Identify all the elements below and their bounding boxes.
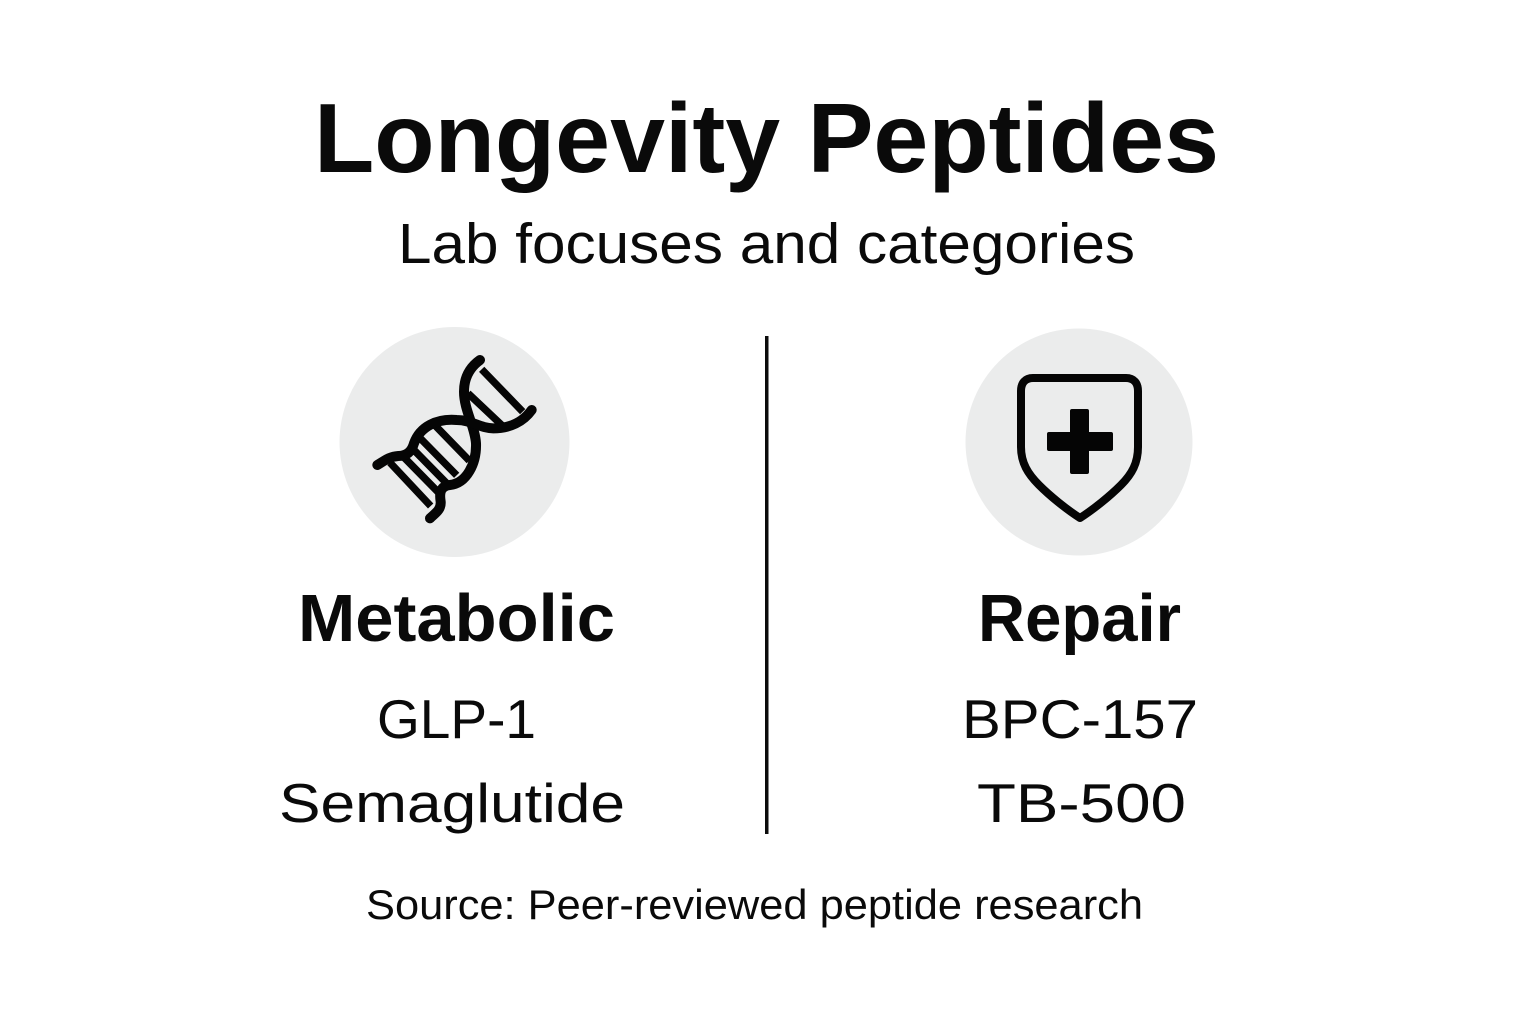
icon: DNA helix <box>340 327 570 557</box>
heading: Repair: Repair <box>978 581 1181 656</box>
subtitle: Lab focuses and categories <box>398 212 1135 276</box>
heading: Metabolic: Metabolic <box>298 581 615 656</box>
panel: metabolic <box>279 327 625 834</box>
panel: repair <box>962 328 1198 834</box>
title: Longevity Peptides <box>314 83 1219 193</box>
item: GLP-1: GLP-1 <box>377 688 536 750</box>
center divider <box>765 336 768 834</box>
icon: shield with cross <box>966 328 1192 556</box>
item: BPC-157: BPC-157 <box>962 688 1198 750</box>
item: TB-500: TB-500 <box>977 772 1186 834</box>
source note: Source: Peer-reviewed peptide research <box>366 881 1143 928</box>
item: Semaglutide: Semaglutide <box>279 772 625 834</box>
